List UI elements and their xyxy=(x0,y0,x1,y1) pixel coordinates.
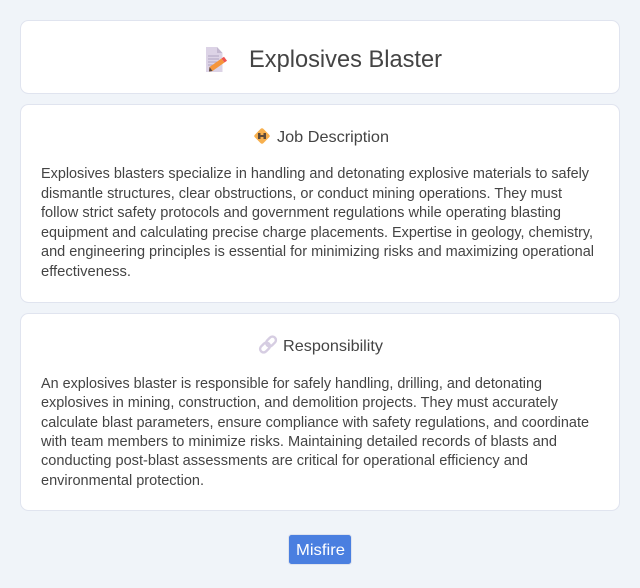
text block: responsibility: explosives in mining, construction, and demolition projects. They must accurately xyxy=(41,395,559,411)
text block: job description: follow strict safety protocols and government regulations while operating blasting xyxy=(41,205,561,221)
title: Explosives Blaster xyxy=(249,46,442,73)
text block: job description: Explosives blasters specialize in handling and detonating explosive materials to safely xyxy=(41,166,590,182)
text block: job description xyxy=(41,166,594,280)
icon: document with pencil xyxy=(206,47,227,72)
panel: title card xyxy=(20,20,620,94)
text block: responsibility: with team members to minimize risks. Maintaining detailed records of blasts and xyxy=(40,434,557,450)
icon: warning diamond xyxy=(254,128,270,144)
heading: responsibility: Responsibility xyxy=(283,338,383,355)
panel: responsibility xyxy=(20,314,620,510)
icon: chain link xyxy=(259,335,277,354)
text block: responsibility: environmental protection. xyxy=(41,473,204,489)
heading: job description: Job Description xyxy=(277,129,389,146)
button: misfire: Misfire xyxy=(296,542,345,559)
text block: job description: equipment and calculating precise charge placements. Expertise in geology, chemistry, xyxy=(41,225,593,241)
text block: responsibility: conducting post-blast assessments are critical for operational efficiency and xyxy=(41,453,528,469)
text block: job description: dismantle structures, clear obstructions, or conduct mining operations. They must xyxy=(41,186,562,202)
text block: responsibility xyxy=(40,376,589,489)
button: misfire xyxy=(288,534,352,564)
text block: job description: effectiveness. xyxy=(41,264,131,280)
text block: responsibility: calculate blast parameters, ensure compliance with safety regulations, and coordinate xyxy=(41,415,589,431)
text block: responsibility: An explosives blaster is responsible for safely handling, drilling, and detonating xyxy=(41,376,542,392)
panel: job description xyxy=(20,104,620,302)
text block: job description: and engineering principles is essential for minimizing risks and maximizing operational xyxy=(41,244,594,260)
